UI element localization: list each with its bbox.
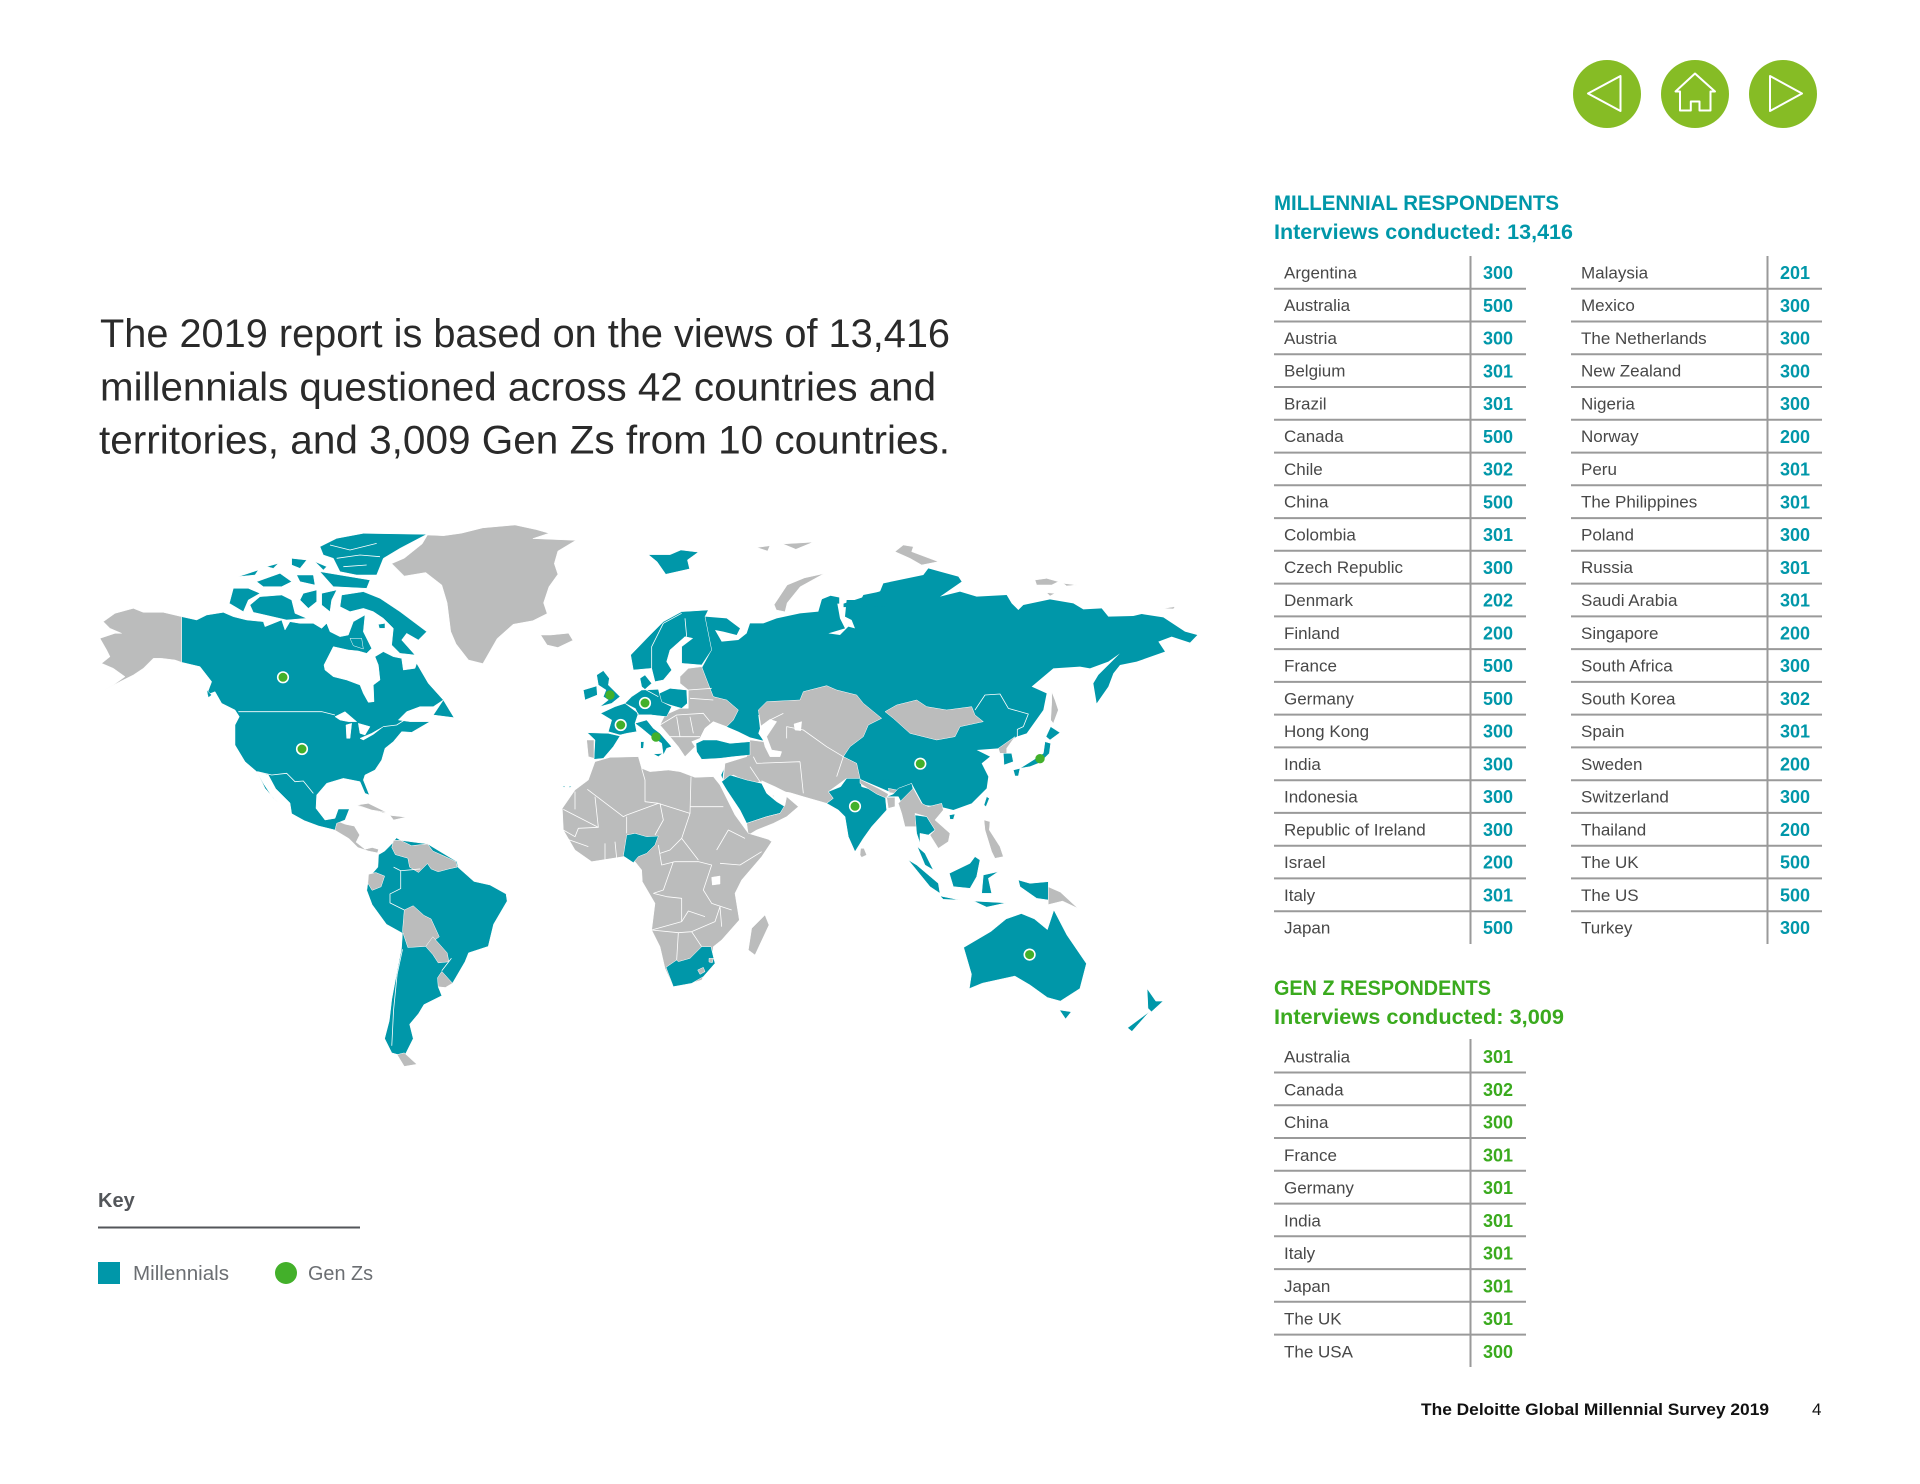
row: Finland: 200: [1483, 623, 1513, 643]
Svalbard: [648, 550, 698, 574]
row: The UK: 301: [1483, 1309, 1513, 1329]
row: Saudi Arabia: 301: [1780, 591, 1810, 611]
row: Russia: [1581, 558, 1810, 578]
icon: forward arrow button: [1749, 60, 1817, 128]
Yemen and Oman: [747, 797, 798, 835]
row: Norway: [1581, 427, 1810, 447]
row: South Korea: 302: [1780, 689, 1810, 709]
row: Austria: Austria: [1284, 329, 1337, 348]
row: Canada: [1284, 427, 1513, 447]
marker: Japan: [1035, 754, 1045, 763]
table: millennial respondents, right column: [1571, 256, 1822, 944]
Sicily and Sardinia: [641, 742, 663, 757]
row: Japan: Japan: [1284, 919, 1330, 938]
row: Turkey: [1581, 918, 1810, 938]
heading: Gen Z respondents: Interviews conducted: 3,009: [1274, 1006, 1564, 1029]
row: France: France: [1284, 1146, 1337, 1165]
row: South Africa: South Africa: [1581, 656, 1673, 676]
row: Sweden: [1581, 754, 1810, 774]
Saudi Arabia: [722, 775, 785, 823]
row: Australia: [1284, 296, 1513, 316]
row: Argentina: [1284, 263, 1513, 283]
row: Singapore: [1581, 623, 1810, 643]
row: Saudi Arabia: [1581, 591, 1810, 611]
row: Austria: [1284, 328, 1513, 348]
Foxe Basin island: [378, 623, 385, 628]
South Africa: [666, 947, 715, 987]
key item: Gen Zs: Gen Zs: [308, 1263, 373, 1285]
row: New Zealand: [1581, 361, 1810, 381]
row: Australia: 500: [1483, 296, 1513, 316]
row: The Philippines: [1581, 492, 1810, 512]
row: Thailand: 200: [1780, 820, 1810, 840]
Spain: [587, 733, 620, 759]
row: Italy: 301: [1483, 885, 1513, 905]
row: Australia: 301: [1483, 1047, 1513, 1067]
row: The US: The US: [1581, 886, 1639, 905]
Central Asia, Iran and Middle East: [723, 686, 882, 803]
Japan: [1013, 727, 1060, 776]
row: The USA: 300: [1483, 1342, 1513, 1362]
Venezuela and the Guianas: [392, 840, 457, 872]
Australia: [964, 910, 1086, 1001]
row: Russia: 301: [1780, 558, 1810, 578]
row: Israel: Israel: [1284, 853, 1326, 872]
row: Czech Republic: 300: [1483, 558, 1513, 578]
row: China: China: [1284, 1113, 1329, 1132]
row: Canada: 500: [1483, 427, 1513, 447]
row: Nigeria: 300: [1780, 394, 1810, 414]
Uruguay: [437, 971, 452, 987]
India: [827, 778, 887, 852]
row: Denmark: [1284, 591, 1513, 611]
row: Republic of Ireland: 300: [1483, 820, 1513, 840]
marker: Australia: [1024, 949, 1035, 960]
Lesser Sunda Islands: [974, 901, 1006, 907]
Central America and Caribbean: [333, 804, 406, 853]
Tasmania: [1060, 1010, 1071, 1019]
row: Belgium: [1284, 361, 1513, 381]
row: Turkey: 300: [1780, 918, 1810, 938]
Mongolia: [885, 700, 983, 740]
navigation buttons: [1573, 60, 1817, 128]
table: Gen Z respondents: [1274, 1039, 1526, 1367]
marker: France: [615, 720, 626, 730]
row: Mexico: [1581, 296, 1810, 316]
row: Nigeria: [1581, 394, 1810, 414]
row: Australia: Australia: [1284, 1048, 1351, 1066]
row: The Netherlands: The Netherlands: [1581, 329, 1707, 348]
Africa continent: [562, 757, 772, 987]
Taiwan and Hainan: [949, 797, 989, 819]
North-east India: [887, 783, 913, 803]
Persian Gulf: [762, 781, 797, 803]
row: Chile: [1284, 460, 1513, 480]
row: Brazil: Brazil: [1284, 394, 1327, 413]
Myanmar, Laos, Vietnam, Cambodia: [898, 788, 950, 848]
Israel: [721, 768, 724, 780]
Korean Peninsula: [998, 737, 1015, 765]
Eastern Europe and Balkans: [660, 667, 738, 757]
row: Spain: Spain: [1581, 722, 1624, 741]
Denmark: [640, 675, 652, 689]
Ireland: [583, 686, 597, 700]
row: Germany: Germany: [1284, 689, 1354, 708]
row: Czech Republic: Czech Republic: [1284, 558, 1404, 577]
Iceland: [541, 633, 573, 647]
headline text: territories, and 3,009 Gen Zs from 10 countries.: [99, 418, 950, 462]
icon: back arrow button: [1573, 60, 1641, 128]
New Zealand: [1128, 989, 1163, 1031]
row: Thailand: Thailand: [1581, 820, 1646, 839]
row: Saudi Arabia: Saudi Arabia: [1581, 591, 1678, 610]
row: The USA: The USA: [1284, 1342, 1354, 1361]
Italy: [635, 720, 672, 755]
icon: home button: [1661, 60, 1729, 128]
row: India: India: [1284, 1211, 1321, 1230]
row: India: India: [1284, 755, 1321, 774]
key item: Gen Zs: [275, 1262, 373, 1285]
row: Switzerland: 300: [1780, 787, 1810, 807]
row: Belgium: 301: [1483, 361, 1513, 381]
row: Japan: 301: [1483, 1276, 1513, 1296]
marker: Italy: [651, 732, 661, 742]
row: Germany: 301: [1483, 1178, 1513, 1198]
row: The Netherlands: 300: [1780, 328, 1810, 348]
row: Japan: [1284, 1276, 1513, 1296]
row: The UK: 500: [1780, 853, 1810, 873]
row: France: France: [1284, 656, 1337, 676]
row: Norway: 200: [1780, 427, 1810, 447]
row: Poland: Poland: [1581, 526, 1634, 544]
row: Singapore: 200: [1780, 623, 1810, 643]
Scandinavia: [631, 610, 712, 682]
row: China: China: [1284, 493, 1329, 512]
row: Hong Kong: [1284, 722, 1513, 742]
row: Czech Republic: [1284, 558, 1513, 578]
row: Nigeria: Nigeria: [1581, 394, 1635, 413]
row: Sweden: Sweden: [1581, 755, 1642, 774]
map: Arctic islands and Oceania: [648, 542, 1163, 1031]
row: Indonesia: 300: [1483, 787, 1513, 807]
row: The Philippines: The Philippines: [1581, 493, 1697, 512]
row: The UK: The UK: [1284, 1310, 1342, 1329]
row: France: 500: [1483, 656, 1513, 676]
Germany, Benelux, Czech Republic, Austria, Switzerland: [625, 689, 672, 717]
heading: millennial respondents: Interviews conducted: 13,416: [1274, 221, 1573, 244]
Great Lakes: [335, 712, 383, 740]
Lesotho and Eswatini: [698, 958, 713, 974]
row: Finland: [1284, 623, 1513, 643]
row: France: [1284, 656, 1513, 676]
row: Italy: [1284, 1244, 1513, 1264]
row: Italy: Italy: [1284, 886, 1316, 905]
footer: 4: [1812, 1400, 1821, 1419]
row: Chile: Chile: [1284, 460, 1323, 479]
row: Malaysia: [1581, 263, 1810, 283]
row: Sweden: 200: [1780, 754, 1810, 774]
row: Chile: 302: [1483, 460, 1513, 480]
row: Israel: [1284, 853, 1513, 873]
row: China: 300: [1483, 1112, 1513, 1132]
row: Republic of Ireland: Republic of Ireland: [1284, 820, 1426, 839]
row: Germany: Germany: [1284, 1179, 1354, 1198]
map: Russia and China: [858, 568, 1197, 810]
row: France: [1284, 1145, 1513, 1165]
Turkey: [696, 740, 750, 759]
row: Brazil: 301: [1483, 394, 1513, 414]
row: Japan: [1284, 918, 1513, 938]
row: Spain: 301: [1780, 722, 1810, 742]
key: [98, 1190, 373, 1285]
row: Australia: [1284, 1047, 1513, 1067]
row: India: [1284, 1211, 1513, 1231]
row: Colombia: Colombia: [1284, 526, 1356, 544]
row: Australia: Australia: [1284, 296, 1351, 315]
row: China: [1284, 1112, 1513, 1132]
row: Colombia: [1284, 525, 1513, 545]
row: Poland: 300: [1780, 525, 1810, 545]
heading: Gen Z respondents: GEN Z RESPONDENTS: [1274, 977, 1491, 1000]
row: Israel: 200: [1483, 853, 1513, 873]
row: Canada: 302: [1483, 1080, 1513, 1100]
row: China: [1284, 492, 1513, 512]
row: Germany: [1284, 689, 1513, 709]
Northern Russian coast patch: [822, 590, 887, 607]
row: Argentina: Argentina: [1284, 263, 1357, 282]
key heading: Key: [98, 1190, 136, 1212]
map: East and South-East Asia details: [860, 545, 1175, 900]
row: Hong Kong: Hong Kong: [1284, 722, 1369, 741]
row: Indonesia: Indonesia: [1284, 788, 1358, 807]
row: The US: [1581, 885, 1810, 905]
Greenland: [392, 525, 576, 664]
row: The UK: [1284, 1309, 1513, 1329]
marker: UK: [605, 690, 615, 700]
row: The US: 500: [1780, 885, 1810, 905]
marker: China: [915, 758, 926, 769]
row: Mexico: Mexico: [1581, 296, 1635, 315]
Poland: [659, 688, 687, 708]
Indonesia west and Borneo: [908, 857, 1048, 900]
Alaska: [100, 608, 182, 691]
map: Western Russia, Europe, Middle East and India: [583, 600, 890, 852]
South America: [367, 838, 507, 1056]
Aral Sea: [794, 722, 802, 731]
row: Malaysia: Malaysia: [1581, 263, 1649, 282]
headline text: millennials questioned across 42 countries and: [100, 366, 936, 410]
row: Canada: [1284, 1080, 1513, 1100]
row: Poland: [1581, 525, 1810, 545]
world map: [100, 525, 1197, 1066]
row: India: 301: [1483, 1211, 1513, 1231]
row: Brazil: [1284, 394, 1513, 414]
row: Austria: 300: [1483, 328, 1513, 348]
Canary Islands: [562, 786, 572, 788]
headline text: The 2019 report is based on the views of 13,416: [100, 312, 950, 356]
row: Finland: Finland: [1284, 624, 1340, 643]
Philippines: [984, 820, 1003, 858]
row: Japan: 500: [1483, 918, 1513, 938]
Western Russia: [702, 600, 890, 741]
row: South Africa: [1581, 656, 1810, 676]
row: South Korea: [1581, 689, 1810, 709]
Cuba: [357, 803, 387, 812]
row: Republic of Ireland: [1284, 820, 1513, 840]
row: Canada: Canada: [1284, 427, 1344, 446]
Bolivia: [402, 906, 439, 947]
row: India: 300: [1483, 754, 1513, 774]
row: Denmark: Denmark: [1284, 591, 1353, 610]
Nepal and Bhutan: [860, 779, 897, 798]
row: Norway: Norway: [1581, 427, 1639, 446]
row: Hong Kong: 300: [1483, 722, 1513, 742]
Thailand: [915, 815, 935, 843]
row: Peru: [1581, 460, 1810, 480]
marker: Germany: [640, 698, 650, 708]
France: [601, 703, 638, 735]
heading: millennial respondents: [1274, 192, 1573, 244]
Nigeria: [623, 833, 658, 863]
table: millennial respondents, left column: [1274, 256, 1526, 944]
row: Malaysia: 201: [1780, 263, 1810, 283]
row: Switzerland: Switzerland: [1581, 788, 1669, 807]
Lake Victoria: [712, 876, 720, 885]
row: Italy: [1284, 885, 1513, 905]
row: Belgium: Belgium: [1284, 362, 1345, 381]
heading: Gen Z respondents: [1274, 977, 1564, 1029]
row: Denmark: 202: [1483, 591, 1513, 611]
row: Russia: Russia: [1581, 558, 1634, 577]
marker: India: [850, 801, 860, 812]
row: The Netherlands: [1581, 328, 1810, 348]
map: Africa: [562, 757, 772, 987]
row: Italy: Italy: [1284, 1244, 1316, 1263]
row: Switzerland: [1581, 787, 1810, 807]
Russian Arctic islands: [895, 545, 1175, 609]
Papua New Guinea: [1048, 887, 1078, 908]
row: New Zealand: 300: [1780, 361, 1810, 381]
marker: Canada: [278, 672, 288, 683]
Novaya Zemlya and Franz Josef Land: [757, 542, 824, 612]
Great Britain: [597, 671, 620, 707]
row: The UK: The UK: [1581, 853, 1639, 872]
row: South Africa: 300: [1780, 656, 1810, 676]
heading: millennial respondents: MILLENNIAL RESPONDENTS: [1274, 192, 1559, 215]
row: Argentina: 300: [1483, 263, 1513, 283]
Madagascar: [748, 915, 769, 955]
Sakhalin: [1051, 692, 1058, 723]
row: Peru: 301: [1780, 460, 1810, 480]
key item: millennials: Millennials: [133, 1263, 229, 1285]
row: Canada: Canada: [1284, 1080, 1344, 1099]
marker: USA: [297, 744, 307, 754]
Tierra del Fuego: [397, 1053, 417, 1066]
Sri Lanka: [860, 848, 867, 857]
Caspian Sea: [760, 719, 782, 757]
Western China: [843, 710, 890, 780]
Arctic archipelago, Baffin and Newfoundland: [207, 533, 454, 803]
row: The USA: [1284, 1342, 1513, 1362]
Bangladesh: [887, 797, 895, 808]
headline text: [99, 312, 950, 462]
row: Singapore: Singapore: [1581, 624, 1659, 643]
row: Japan: Japan: [1284, 1277, 1330, 1296]
row: Germany: 500: [1483, 689, 1513, 709]
row: Turkey: Turkey: [1581, 919, 1633, 938]
row: South Korea: South Korea: [1581, 689, 1676, 708]
Black Sea: [700, 722, 747, 742]
row: Germany: [1284, 1178, 1513, 1198]
row: Thailand: [1581, 820, 1810, 840]
map: Canada, USA, Mexico and Alaska: [100, 533, 454, 830]
map: Greenland, Central and South America: [333, 525, 576, 1066]
row: The UK: [1581, 853, 1810, 873]
Portugal: [587, 740, 594, 758]
key item: millennials: [98, 1262, 229, 1285]
row: Colombia: 301: [1483, 525, 1513, 545]
row: Mexico: 300: [1780, 296, 1810, 316]
row: The Philippines: 301: [1780, 492, 1810, 512]
row: Peru: Peru: [1581, 460, 1617, 479]
row: Indonesia: [1284, 787, 1513, 807]
Ecuador: [368, 872, 385, 890]
map markers: Gen Z countries: [278, 672, 1045, 960]
footer: The Deloitte Global Millennial Survey 2019: [1421, 1400, 1769, 1419]
row: India: [1284, 754, 1513, 774]
row: New Zealand: New Zealand: [1581, 362, 1681, 381]
Malaysia: [917, 847, 933, 870]
row: Italy: 301: [1483, 1244, 1513, 1264]
row: Spain: [1581, 722, 1810, 742]
row: France: 301: [1483, 1145, 1513, 1165]
Paraguay: [426, 937, 449, 963]
row: China: 500: [1483, 492, 1513, 512]
Canada, USA and Mexico mainland: [182, 612, 443, 830]
